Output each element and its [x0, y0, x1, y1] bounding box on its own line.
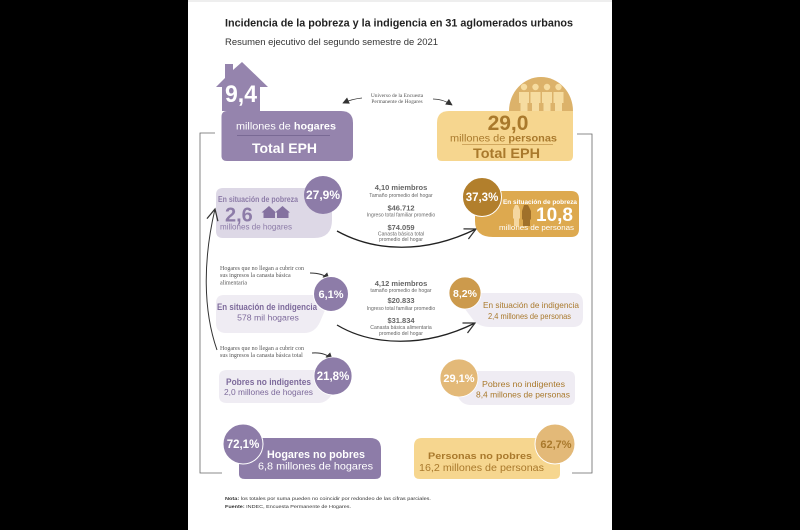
- panel: households in indigence: [216, 276, 348, 333]
- non-indigent households value: 2,0 millones de hogares: [224, 387, 313, 397]
- panel: non-indigent poor persons: 29,1%: [443, 373, 475, 385]
- persons total label: Total EPH: [473, 145, 540, 161]
- poverty statistics: $46.712: [387, 204, 415, 212]
- panel: total households: [216, 62, 353, 161]
- persons figure: 29,0: [488, 112, 528, 135]
- indigence statistics: Ingreso total familiar promedio: [367, 306, 435, 312]
- households label: millones de hogares: [236, 120, 336, 132]
- non-poor persons percent: [535, 424, 575, 464]
- indigence households label: En situación de indigencia: [217, 302, 318, 312]
- subtitle: Resumen ejecutivo del segundo semestre de 2021: [225, 37, 438, 48]
- note: total basket: [220, 346, 332, 359]
- indigence persons value: 2,4 millones de personas: [488, 311, 571, 321]
- arrow: indigence households to persons: [337, 323, 475, 341]
- footnote: [225, 496, 431, 510]
- note: food basket: sus ingresos la canasta básica: [220, 273, 291, 279]
- arrow: poverty households to persons: [337, 229, 476, 247]
- panel: non-indigent poor households: 21,8%: [317, 371, 349, 383]
- indigence households value: 578 mil hogares: [237, 312, 300, 322]
- note: total basket: Hogares que no llegan a cubrir con: [220, 346, 304, 352]
- indigence statistics: [367, 279, 435, 337]
- panel: total persons: [437, 77, 573, 161]
- non-indigent persons label: Pobres no indigentes: [482, 379, 565, 389]
- poverty statistics: 4,10 miembros: [375, 183, 427, 192]
- panel: non-poor persons: 62,7%: [540, 439, 572, 451]
- poverty statistics: [367, 183, 435, 243]
- indigence persons percent: [449, 277, 481, 309]
- panel: households in poverty: 27,9%: [306, 188, 340, 202]
- panel: non-poor households: 72,1%: [227, 439, 259, 451]
- poverty households label: En situación de pobreza: [218, 195, 298, 204]
- footnote: Nota: los totales por suma pueden no coincidir por redondeo de las cifras parciales.: [225, 496, 431, 502]
- non-poor persons label: Personas no pobres: [428, 451, 532, 462]
- indigence statistics: promedio del hogar: [379, 331, 423, 337]
- non-indigent persons percent: [440, 359, 478, 397]
- indigence statistics: tamaño promedio de hogar: [370, 288, 432, 294]
- non-poor households value: 6,8 millones de hogares: [258, 460, 373, 472]
- panel: households in indigence: 6,1%: [318, 289, 344, 301]
- persons label: millones de personas: [450, 134, 558, 144]
- poverty households figure: 2,6: [225, 204, 253, 226]
- panel: non-poor persons: [414, 424, 575, 479]
- poverty persons unit: millones de personas: [499, 225, 575, 232]
- non-poor households label: Hogares no pobres: [267, 449, 365, 461]
- panel: households in poverty: [216, 176, 342, 238]
- poverty statistics: Canasta básica total: [378, 232, 424, 238]
- panel: persons in indigence: 8,2%: [453, 288, 478, 300]
- universe note with arrows: Universo de la Encuesta: [371, 93, 424, 99]
- panel: persons in indigence: [449, 277, 583, 327]
- poverty statistics: promedio del hogar: [379, 237, 423, 243]
- indigence persons label: En situación de indigencia: [483, 300, 579, 310]
- title: Incidencia de la pobreza y la indigencia en 31 aglomerados urbanos: [225, 18, 573, 30]
- connector brackets: [200, 133, 592, 473]
- note: food basket: [220, 266, 329, 286]
- poverty persons figure: 10,8: [536, 205, 573, 226]
- poverty statistics: Ingreso total familiar promedio: [367, 212, 435, 218]
- panel: persons in poverty: [462, 178, 579, 237]
- non-indigent households percent: [314, 357, 352, 395]
- poverty persons percent: [462, 178, 502, 216]
- note: total basket: sus ingresos la canasta básica total: [220, 353, 303, 359]
- panel: non-poor households: [223, 424, 381, 479]
- indigence statistics: $31.834: [387, 316, 415, 325]
- arrow: long curve to poverty panel: [206, 209, 217, 350]
- households figure: 9,4: [225, 81, 258, 108]
- icon: two houses: [262, 206, 290, 218]
- non-indigent persons value: 8,4 millones de personas: [476, 390, 570, 400]
- indigence statistics: Canasta básica alimentaria: [370, 325, 432, 331]
- non-poor households percent: [223, 424, 263, 464]
- icon: group of people: [509, 77, 573, 111]
- poverty households percent: [304, 176, 342, 214]
- panel: non-indigent poor persons: [440, 359, 575, 405]
- footnote: Fuente: INDEC, Encuesta Permanente de Hogares.: [225, 504, 351, 510]
- universe note with arrows: [343, 93, 452, 105]
- poverty persons label: En situación de pobreza: [503, 199, 577, 206]
- non-poor persons value: 16,2 millones de personas: [419, 463, 544, 474]
- universe note with arrows: Permanente de Hogares: [371, 99, 423, 105]
- note: food basket: alimentaria: [220, 280, 247, 286]
- panel: non-indigent poor households: [219, 357, 352, 403]
- icon: two people: [513, 205, 520, 226]
- panel: persons in poverty: 37,3%: [466, 192, 498, 204]
- poverty statistics: $74.059: [387, 223, 415, 232]
- poverty households unit: millones de hogares: [220, 222, 292, 232]
- households total label: Total EPH: [252, 140, 317, 156]
- icon: house: [216, 62, 268, 111]
- non-indigent households label: Pobres no indigentes: [226, 377, 311, 387]
- indigence households percent: [314, 276, 348, 312]
- indigence statistics: 4,12 miembros: [375, 279, 427, 288]
- indigence statistics: $20.833: [387, 296, 415, 305]
- note: food basket: Hogares que no llegan a cubrir con: [220, 266, 304, 272]
- poverty statistics: Tamaño promedio del hogar: [369, 193, 433, 199]
